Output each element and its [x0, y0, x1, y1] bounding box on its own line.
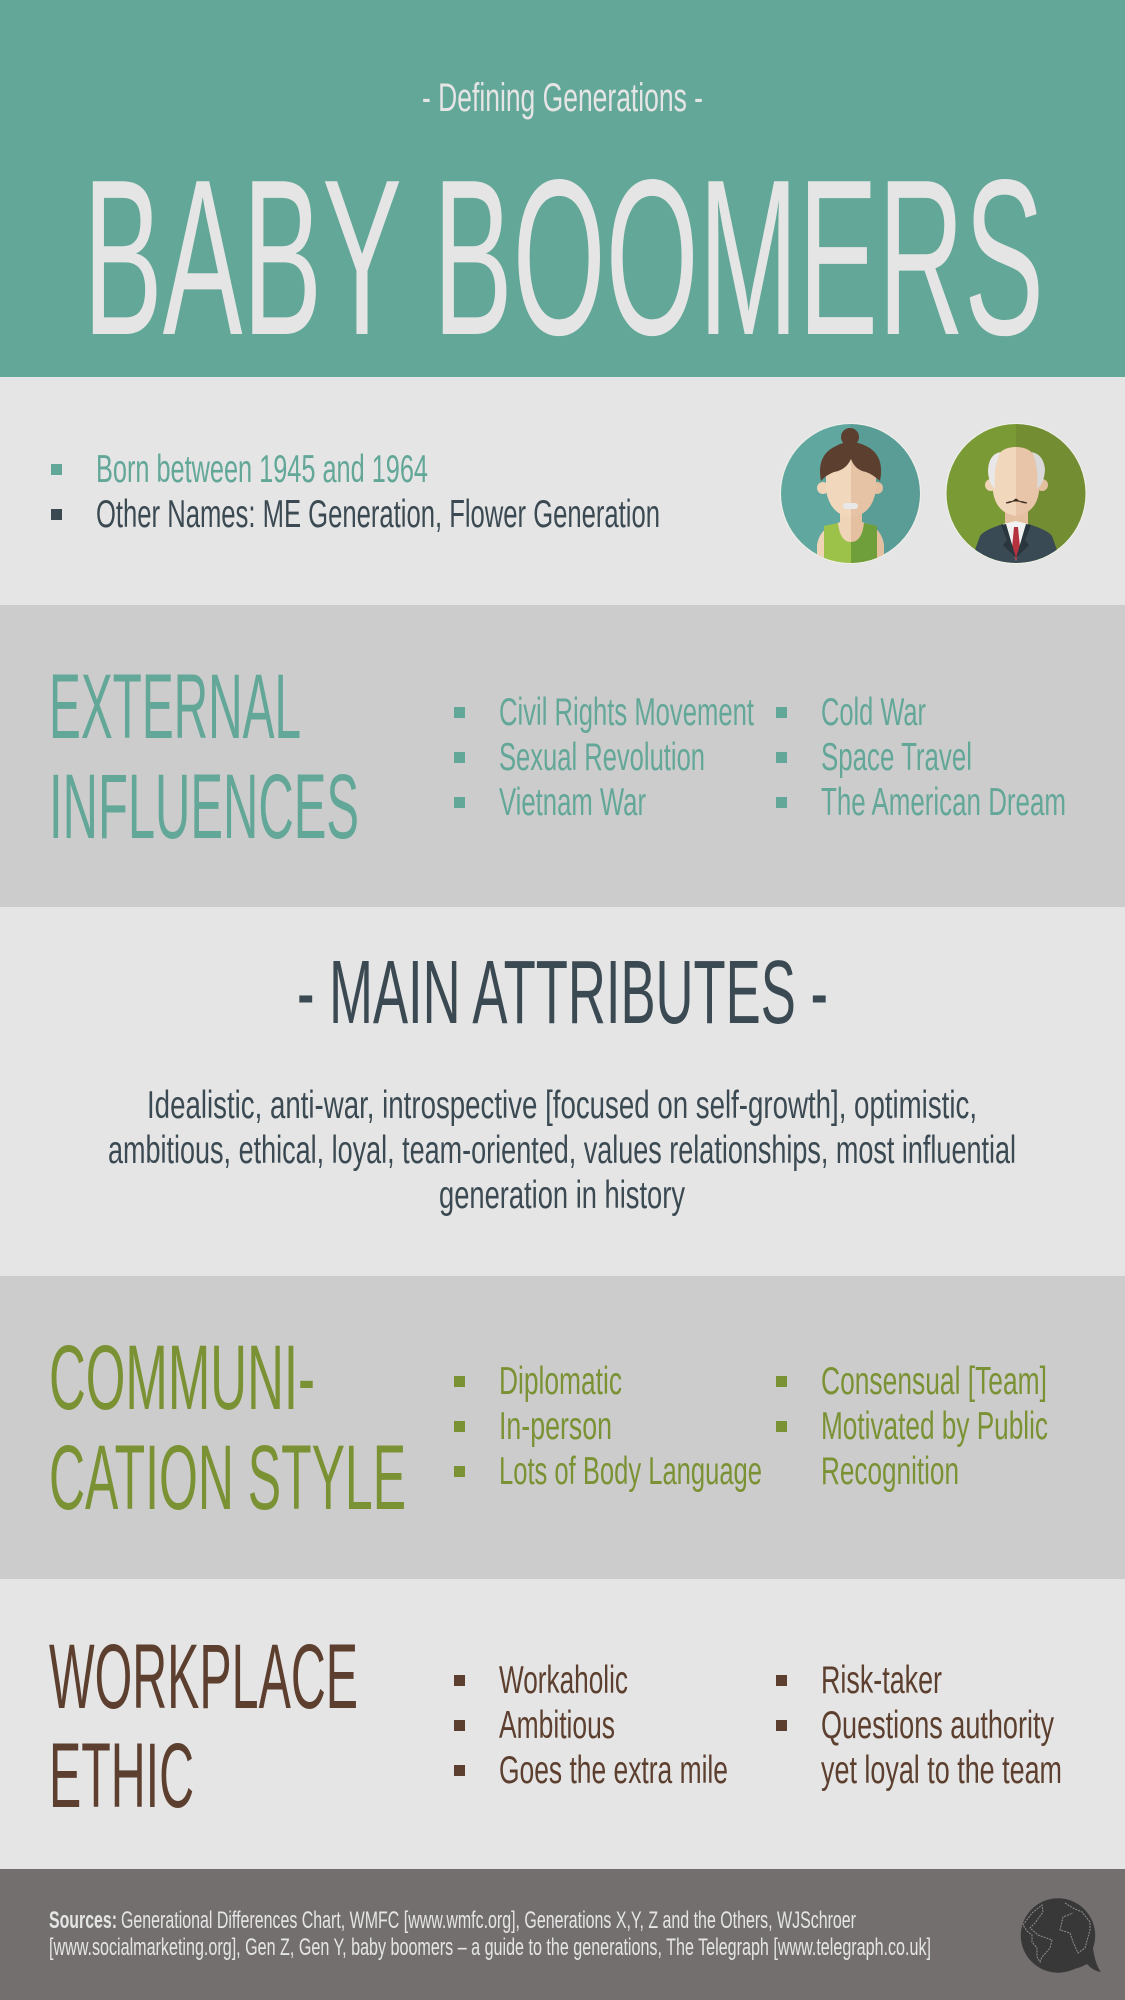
list: influences column one: Vietnam War [499, 781, 646, 824]
panel: workplace ethic [0, 1579, 1125, 1869]
paragraph: attributes [108, 1084, 1016, 1217]
list: communication column one: Diplomatic [499, 1360, 622, 1403]
list: influences column one: Civil Rights Movement [499, 691, 754, 734]
panel: main attributes [0, 907, 1125, 1276]
bullet: born between: Born between 1945 and 1964 [96, 448, 428, 491]
paragraph: attributes: generation in history [439, 1174, 685, 1217]
bullet: other names [51, 493, 660, 536]
list: influences column two: Space Travel [821, 736, 972, 779]
list: communication column one: Lots of Body Language [499, 1450, 762, 1493]
bullet: other names: Other Names: ME Generation, Flower Generation [96, 493, 660, 536]
list: communication column one: In-person [499, 1405, 612, 1448]
heading: communication style [49, 1327, 406, 1529]
list: influences column two: Cold War [821, 691, 926, 734]
list: influences column one: Sexual Revolution [499, 736, 705, 779]
panel: external influences [0, 605, 1125, 907]
panel: footer [0, 1869, 1125, 2000]
icon: woman avatar [780, 423, 921, 570]
list: workplace column one [454, 1659, 728, 1792]
icon: man avatar [946, 423, 1086, 570]
list: communication column one [454, 1360, 762, 1493]
bullet: born between [51, 448, 428, 491]
list: workplace column one: Goes the extra mile [499, 1749, 728, 1792]
sources text: Sources: [49, 1907, 117, 1934]
list: workplace column one: Workaholic [499, 1659, 628, 1702]
heading: external influences: EXTERNAL [49, 656, 301, 758]
subtitle: - Defining Generations - [422, 76, 703, 120]
list: workplace column two: Risk-taker [821, 1659, 942, 1702]
panel: birth years and names [51, 423, 1086, 564]
list: influences column one [454, 691, 754, 824]
list: workplace column one: Ambitious [499, 1704, 615, 1747]
heading: communication style: CATION STYLE [49, 1427, 406, 1529]
panel: header [0, 0, 1125, 382]
list: communication column two: Recognition [821, 1450, 959, 1493]
panel: communication style [0, 1276, 1125, 1579]
list: communication column two [776, 1360, 1048, 1493]
list: workplace column two [776, 1659, 1062, 1792]
icon: globe speech bubble [1021, 1898, 1101, 1973]
heading: external influences: INFLUENCES [49, 756, 359, 858]
sources text [49, 1907, 931, 1961]
heading: communication style: COMMUNI- [49, 1327, 315, 1429]
heading: external influences [49, 656, 359, 858]
list: influences column two [776, 691, 1066, 824]
heading: workplace ethic: WORKPLACE [49, 1626, 358, 1728]
heading: workplace ethic: ETHIC [49, 1725, 194, 1827]
heading: workplace ethic [49, 1626, 358, 1827]
